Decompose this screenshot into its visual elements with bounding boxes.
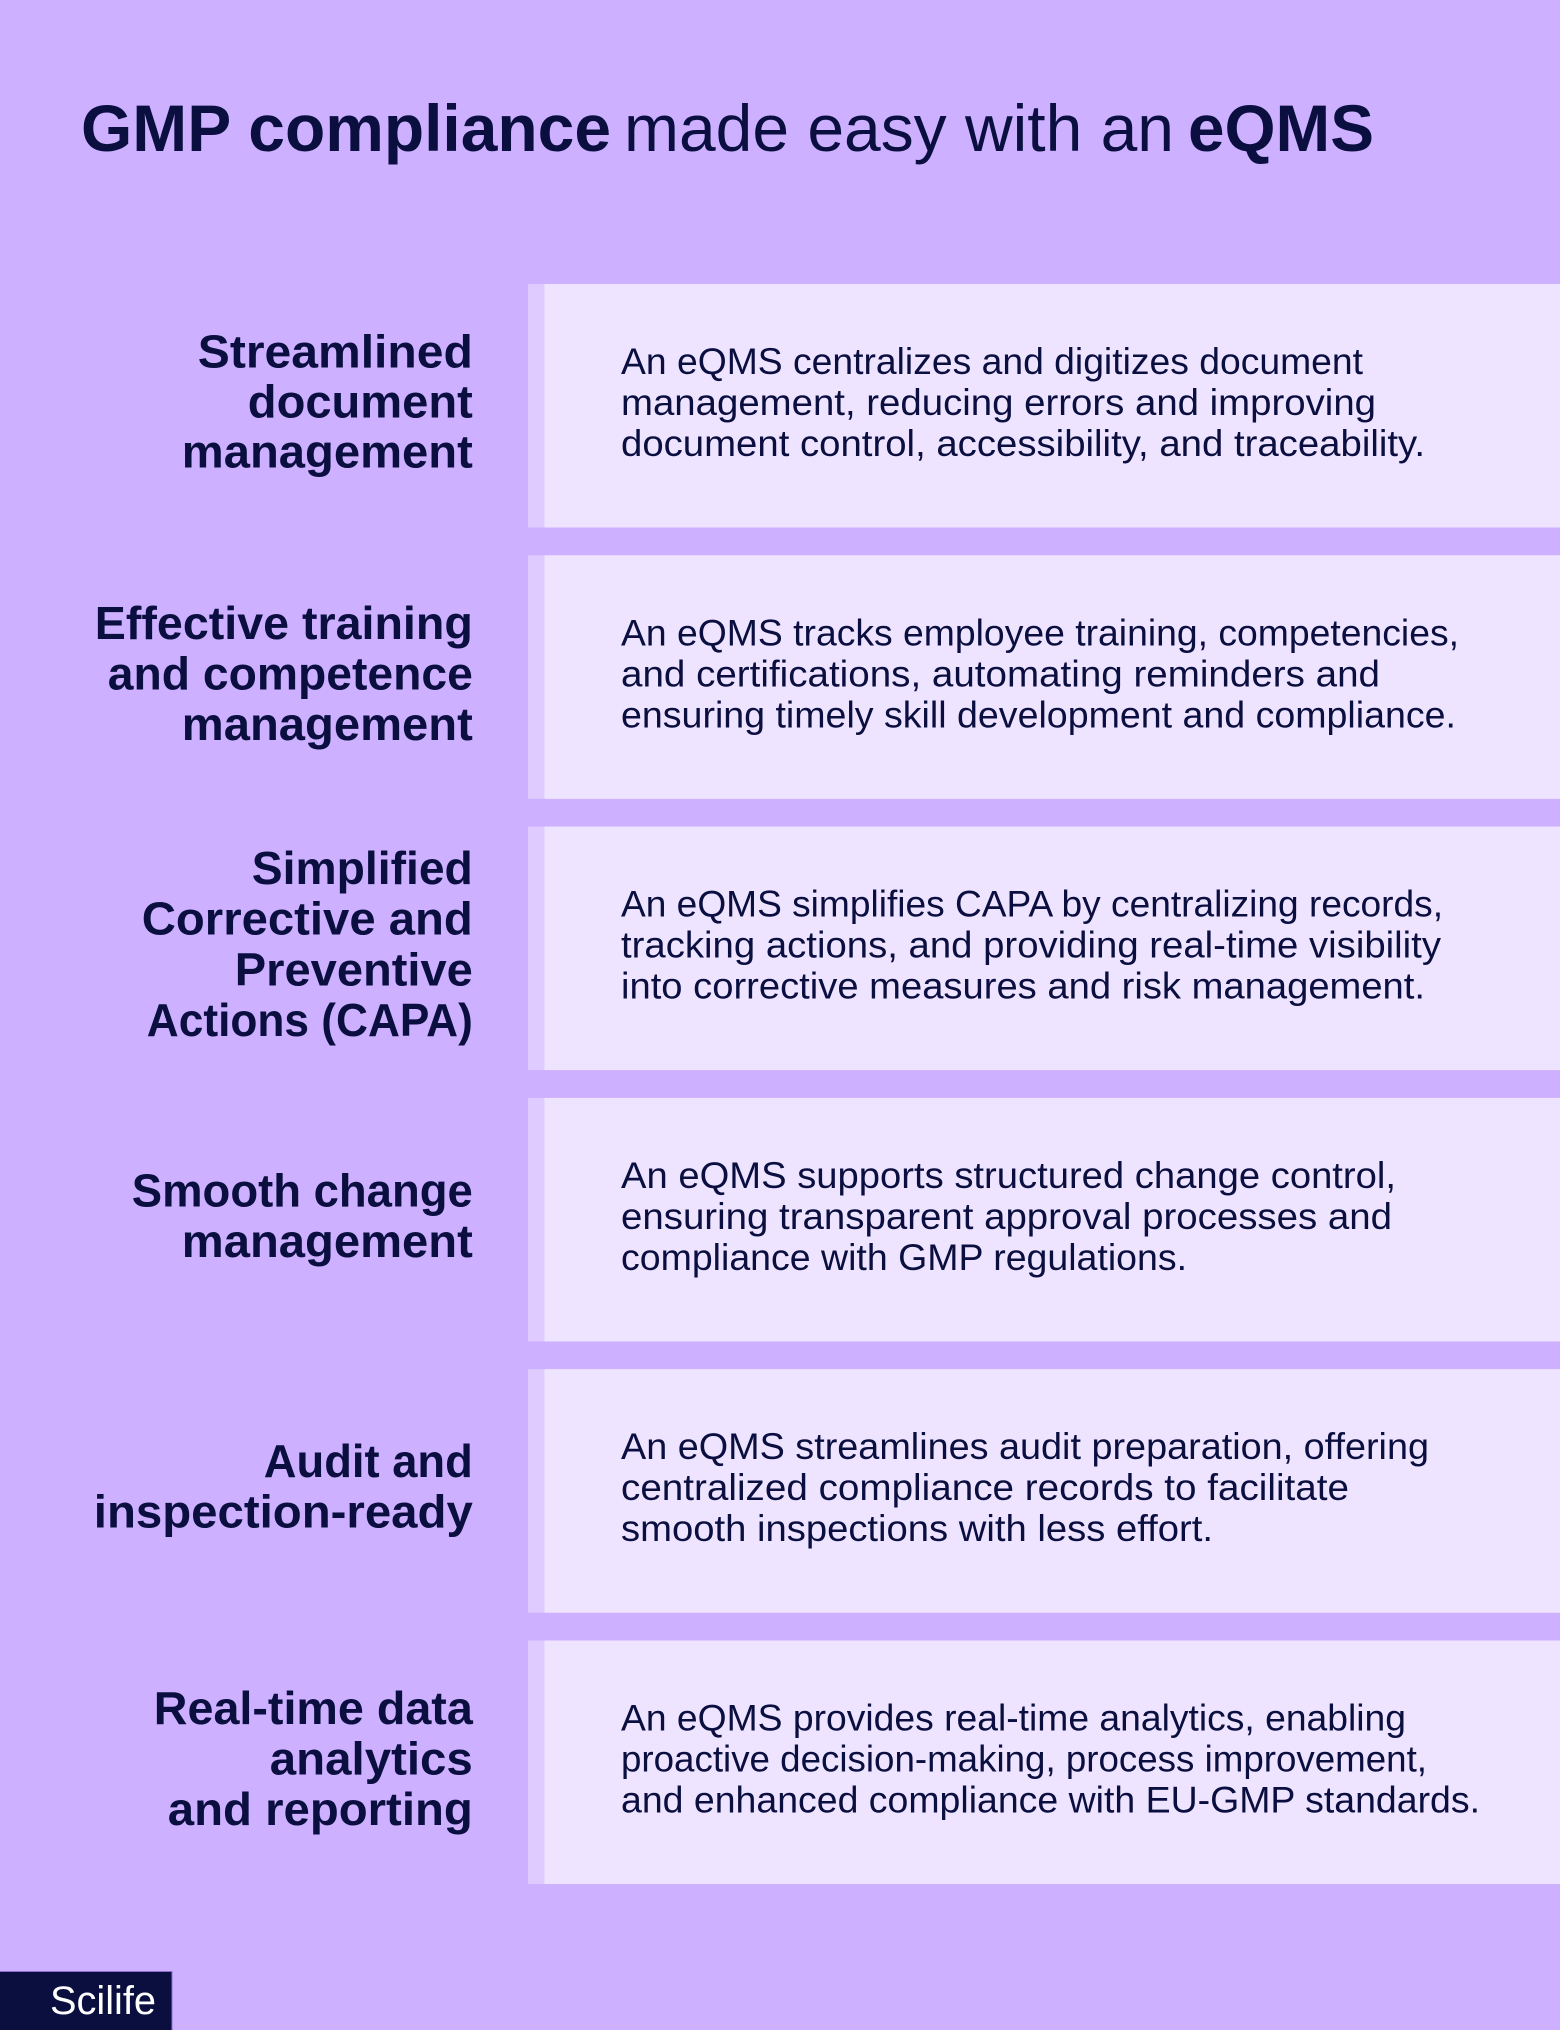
heading: Preventive bbox=[235, 943, 473, 995]
description bbox=[621, 1426, 1429, 1549]
heading bbox=[94, 1435, 473, 1537]
row background bbox=[528, 1640, 1560, 1884]
description: An eQMS supports structured change control, bbox=[621, 1155, 1396, 1196]
description: ensuring timely skill development and compliance. bbox=[621, 694, 1456, 735]
heading: management bbox=[182, 1215, 473, 1267]
description: tracking actions, and providing real-time visibility bbox=[621, 925, 1442, 966]
description: management, reducing errors and improving bbox=[621, 382, 1376, 423]
panel: audit and inspection-ready bbox=[94, 1369, 1560, 1613]
description: and certifications, automating reminders and bbox=[621, 653, 1380, 694]
heading bbox=[95, 597, 473, 750]
heading: Smooth change bbox=[132, 1164, 473, 1216]
row background bbox=[528, 555, 1560, 799]
description: An eQMS tracks employee training, competencies, bbox=[621, 612, 1459, 653]
description: An eQMS simplifies CAPA by centralizing records, bbox=[621, 884, 1443, 925]
heading: Audit and bbox=[264, 1435, 473, 1487]
description: and enhanced compliance with EU-GMP standards. bbox=[621, 1780, 1480, 1820]
heading bbox=[142, 842, 473, 1046]
description: document control, accessibility, and traceability. bbox=[621, 423, 1425, 464]
heading: analytics bbox=[270, 1732, 473, 1784]
heading: and reporting bbox=[168, 1783, 473, 1835]
heading: document bbox=[248, 375, 473, 427]
description: An eQMS streamlines audit preparation, offering bbox=[621, 1426, 1429, 1467]
heading: Actions (CAPA) bbox=[147, 994, 473, 1046]
description bbox=[621, 1155, 1396, 1278]
heading bbox=[182, 325, 473, 477]
panel: streamlined document management bbox=[182, 284, 1560, 528]
row background bbox=[528, 1369, 1560, 1613]
heading: Streamlined bbox=[198, 325, 473, 377]
title: made easy with an bbox=[624, 91, 1174, 165]
logo: Scilife bbox=[0, 1972, 172, 2030]
row background bbox=[528, 1098, 1560, 1341]
description bbox=[621, 884, 1443, 1007]
description: compliance with GMP regulations. bbox=[621, 1237, 1187, 1278]
description bbox=[621, 1698, 1480, 1820]
description: proactive decision-making, process improvement, bbox=[621, 1738, 1427, 1780]
heading: Effective training bbox=[95, 597, 473, 649]
heading: inspection-ready bbox=[94, 1485, 473, 1537]
description: centralized compliance records to facilitate bbox=[621, 1467, 1349, 1508]
panel: real-time data analytics and reporting bbox=[154, 1640, 1560, 1884]
description: ensuring transparent approval processes and bbox=[621, 1196, 1392, 1237]
heading: management bbox=[182, 425, 473, 477]
row background bbox=[528, 827, 1560, 1070]
panel: smooth change management bbox=[132, 1098, 1560, 1341]
description bbox=[621, 612, 1459, 735]
title bbox=[81, 91, 1374, 165]
row background bbox=[528, 284, 1560, 528]
heading: and competence bbox=[108, 647, 473, 699]
description: into corrective measures and risk management. bbox=[621, 966, 1425, 1007]
heading bbox=[132, 1164, 473, 1267]
title: eQMS bbox=[1188, 91, 1374, 165]
heading: Simplified bbox=[252, 842, 473, 894]
heading: Real-time data bbox=[154, 1682, 473, 1734]
heading: management bbox=[182, 698, 473, 750]
description: smooth inspections with less effort. bbox=[621, 1508, 1213, 1549]
description bbox=[621, 341, 1425, 464]
panel: effective training and competence management bbox=[95, 555, 1560, 799]
description: An eQMS provides real-time analytics, enabling bbox=[621, 1698, 1406, 1738]
title: GMP compliance bbox=[81, 91, 611, 165]
logo: Scilife: Scilife bbox=[50, 1979, 156, 2023]
heading: Corrective and bbox=[142, 892, 473, 944]
panel: simplified CAPA bbox=[142, 827, 1560, 1070]
description: An eQMS centralizes and digitizes document bbox=[621, 341, 1364, 382]
heading bbox=[154, 1682, 473, 1835]
